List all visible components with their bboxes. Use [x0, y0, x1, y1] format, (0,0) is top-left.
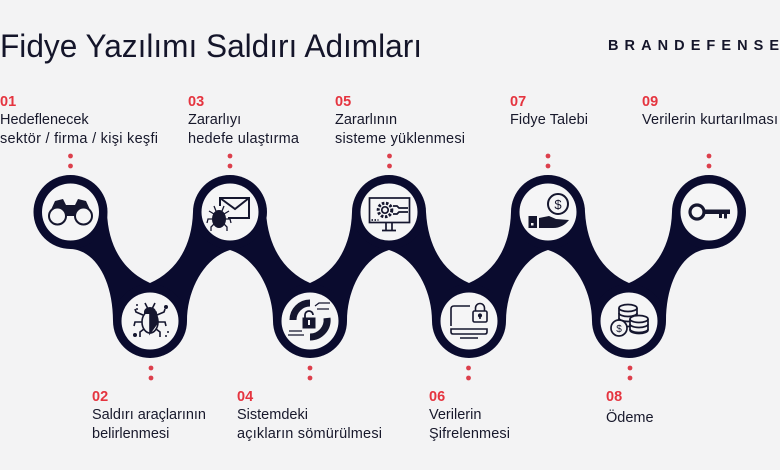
step 02: 02 — [92, 389, 108, 405]
icon: stacked coins — [611, 304, 648, 336]
title: Fidye Yazılımı Saldırı Adımları — [0, 28, 422, 64]
step 06: Verilerin — [429, 407, 481, 423]
icon: bug — [133, 303, 169, 337]
step 08 — [606, 366, 654, 426]
step 03: hedefe ulaştırma — [188, 131, 300, 147]
step 02: Saldırı araçlarının — [92, 407, 206, 423]
step 06: Şifrelenmesi — [429, 426, 510, 442]
icon: envelope and spider — [207, 198, 249, 231]
step 06 — [429, 366, 510, 442]
step 03: Zararlıyı — [188, 112, 241, 128]
step 02 — [92, 366, 206, 442]
step 07: 07 — [510, 94, 526, 110]
step 08: 08 — [606, 389, 622, 405]
icon: broken lock with arrows — [288, 303, 330, 337]
step 04: açıkların sömürülmesi — [237, 426, 382, 442]
step 04: Sistemdeki — [237, 407, 308, 423]
step 01 — [0, 94, 158, 168]
icon: hand holding dollar coin — [528, 194, 569, 228]
icon: monitor with padlock — [451, 304, 487, 338]
step 07 — [510, 94, 588, 168]
icon: monitor with gear and wrench — [370, 198, 410, 230]
step 05: Zararlının — [335, 112, 397, 128]
step 09: Verilerin kurtarılması — [642, 112, 778, 128]
logo: Brandefense: BRANDEFENSE — [608, 38, 779, 54]
step 03: 03 — [188, 94, 204, 110]
step 01: sektör / firma / kişi keşfi — [0, 131, 158, 147]
step 01: 01 — [0, 94, 16, 110]
step 04: 04 — [237, 389, 253, 405]
step 09 — [642, 94, 778, 168]
step 09: 09 — [642, 94, 658, 110]
step 08: Ödeme — [606, 408, 654, 426]
step 07: Fidye Talebi — [510, 112, 588, 128]
icon: binoculars — [49, 199, 92, 224]
icon: hand holding dollar coin: $ — [554, 197, 562, 212]
step 06: 06 — [429, 389, 445, 405]
step 05 — [335, 94, 465, 168]
step 02: belirlenmesi — [92, 426, 169, 442]
timeline ribbon — [34, 175, 746, 358]
step 05: 05 — [335, 94, 351, 110]
icon: stacked coins: $ — [616, 324, 622, 335]
step 04 — [237, 366, 382, 442]
step 03 — [188, 94, 300, 168]
step 05: sisteme yüklenmesi — [335, 131, 465, 147]
step 01: Hedeflenecek — [0, 112, 89, 128]
icon: key — [690, 205, 730, 219]
